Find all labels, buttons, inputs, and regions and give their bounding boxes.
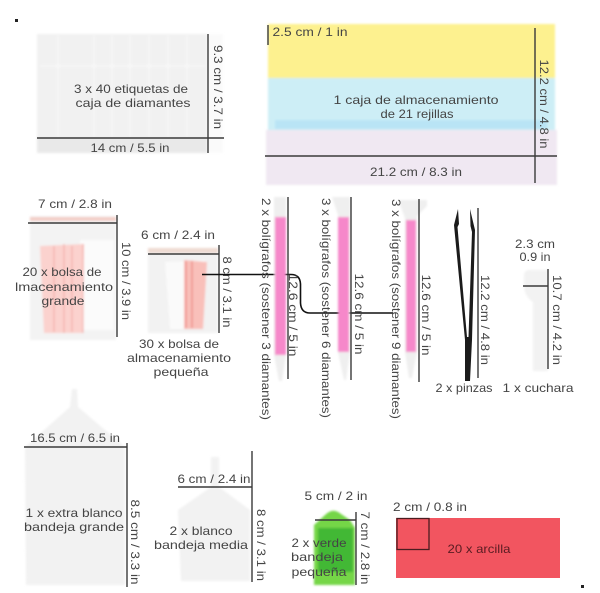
panel: small green tray	[291, 489, 372, 585]
description	[15, 265, 113, 308]
description	[24, 506, 124, 534]
height label: 8 cm / 3.1 in	[220, 256, 234, 328]
description: 2 x verde	[292, 536, 347, 550]
dimension lines	[37, 34, 224, 153]
tray	[314, 511, 355, 585]
panel: tweezers	[436, 208, 492, 395]
description: 3 x bolígrafos (sostener 9 diamantes)	[389, 199, 403, 419]
description: almacenamiento	[127, 351, 231, 365]
description: lmacenamiento	[15, 280, 113, 294]
tray	[25, 389, 125, 585]
spoon	[524, 270, 548, 371]
height label: 10 cm / 3.9 in	[119, 242, 133, 320]
connector line	[202, 274, 393, 313]
description: grande	[42, 294, 85, 308]
width label: 21.2 cm / 8.3 in	[370, 165, 462, 179]
panel: diamond box labels	[37, 34, 225, 155]
height label: 7 cm / 2.8 in	[358, 512, 372, 584]
dimension lines	[265, 25, 557, 183]
width label: 7 cm / 2.8 in	[38, 197, 112, 211]
tray	[178, 457, 250, 581]
panel: small storage bag	[127, 228, 234, 379]
description: bandeja grande	[24, 520, 124, 534]
width label: 6 cm / 2.4 in	[141, 228, 215, 242]
corner depth label: 2.5 cm / 1 in	[272, 25, 348, 39]
description	[154, 524, 248, 552]
panel: spoon	[502, 237, 574, 395]
dimension lines	[315, 512, 356, 585]
width label: 5 cm / 2 in	[304, 489, 368, 503]
description: 20 x bolsa de	[22, 265, 102, 279]
width label: 0.9 in	[520, 250, 550, 264]
pen	[398, 200, 427, 378]
width label: 16.5 cm / 6.5 in	[30, 431, 120, 445]
length label: 12.6 cm / 5 in	[352, 274, 366, 354]
width label: 6 cm / 2.4 in	[178, 472, 250, 486]
dimension lines	[28, 215, 117, 337]
panel: large storage bag	[15, 197, 133, 340]
panel: large white tray	[24, 389, 142, 587]
width label: 14 cm / 5.5 in	[90, 141, 170, 155]
description	[334, 93, 499, 121]
description: caja de diamantes	[76, 96, 190, 110]
description: 1 x extra blanco	[26, 506, 123, 520]
description	[291, 536, 347, 579]
dimension lines	[24, 443, 127, 587]
tweezers	[454, 209, 475, 381]
description: 1 caja de almacenamiento	[334, 93, 499, 107]
pen	[332, 197, 350, 380]
description: 2 x bolígrafos (sostener 3 diamantes)	[259, 198, 273, 420]
label sheet	[37, 34, 223, 153]
dimension line	[418, 199, 420, 382]
bag	[30, 216, 116, 340]
panel: pen holding 9 diamonds	[389, 199, 433, 419]
unit label: 2 cm / 0.8 in	[393, 500, 467, 514]
dimension line	[350, 197, 352, 380]
description: 3 x bolígrafos (sostener 6 diamantes)	[319, 198, 333, 418]
width label: 2.3 cm	[515, 237, 555, 251]
height label: 8.5 cm / 3.3 in	[128, 500, 142, 584]
description: bandeja media	[154, 538, 248, 552]
description	[127, 337, 231, 379]
bag	[148, 248, 218, 333]
length label: 10.7 cm / 4.2 in	[550, 275, 564, 365]
height label: 12.2 cm / 4.8 in	[537, 60, 551, 148]
dimension lines	[523, 269, 548, 369]
description: pequeña	[154, 365, 209, 379]
description: bandeja	[291, 550, 343, 564]
pen	[274, 197, 286, 381]
description: 1 x cuchara	[502, 381, 574, 395]
description: de 21 rejillas	[380, 107, 454, 121]
panel: pen holding 3 diamonds	[259, 197, 300, 420]
dimension line	[287, 197, 289, 379]
panel: clay	[393, 500, 560, 578]
description: 2 x blanco	[170, 524, 233, 538]
description: 20 x arcilla	[448, 542, 511, 556]
panel: medium white tray	[154, 451, 268, 582]
height label: 9.3 cm / 3.7 in	[211, 45, 225, 129]
box colour bands	[266, 24, 557, 185]
description: pequeña	[292, 565, 347, 579]
description: 3 x 40 etiquetas de	[74, 82, 188, 96]
panel: 21-grid storage box	[265, 24, 557, 185]
length label: 12.6 cm / 5 in	[286, 274, 300, 356]
height label: 8 cm / 3.1 in	[254, 509, 268, 581]
clay unit outline	[397, 518, 429, 550]
dimension lines	[178, 451, 252, 582]
length label: 12.2 cm / 4.8 in	[478, 275, 492, 365]
length label: 12.6 cm / 5 in	[419, 274, 433, 356]
description: 30 x bolsa de	[139, 337, 219, 351]
description: 2 x pinzas	[436, 381, 492, 395]
description	[74, 82, 190, 110]
dimension lines	[148, 245, 219, 333]
clay sheet	[396, 518, 560, 578]
dimension line	[477, 208, 479, 378]
panel: pen holding 6 diamonds	[319, 197, 366, 418]
width label	[515, 237, 555, 264]
